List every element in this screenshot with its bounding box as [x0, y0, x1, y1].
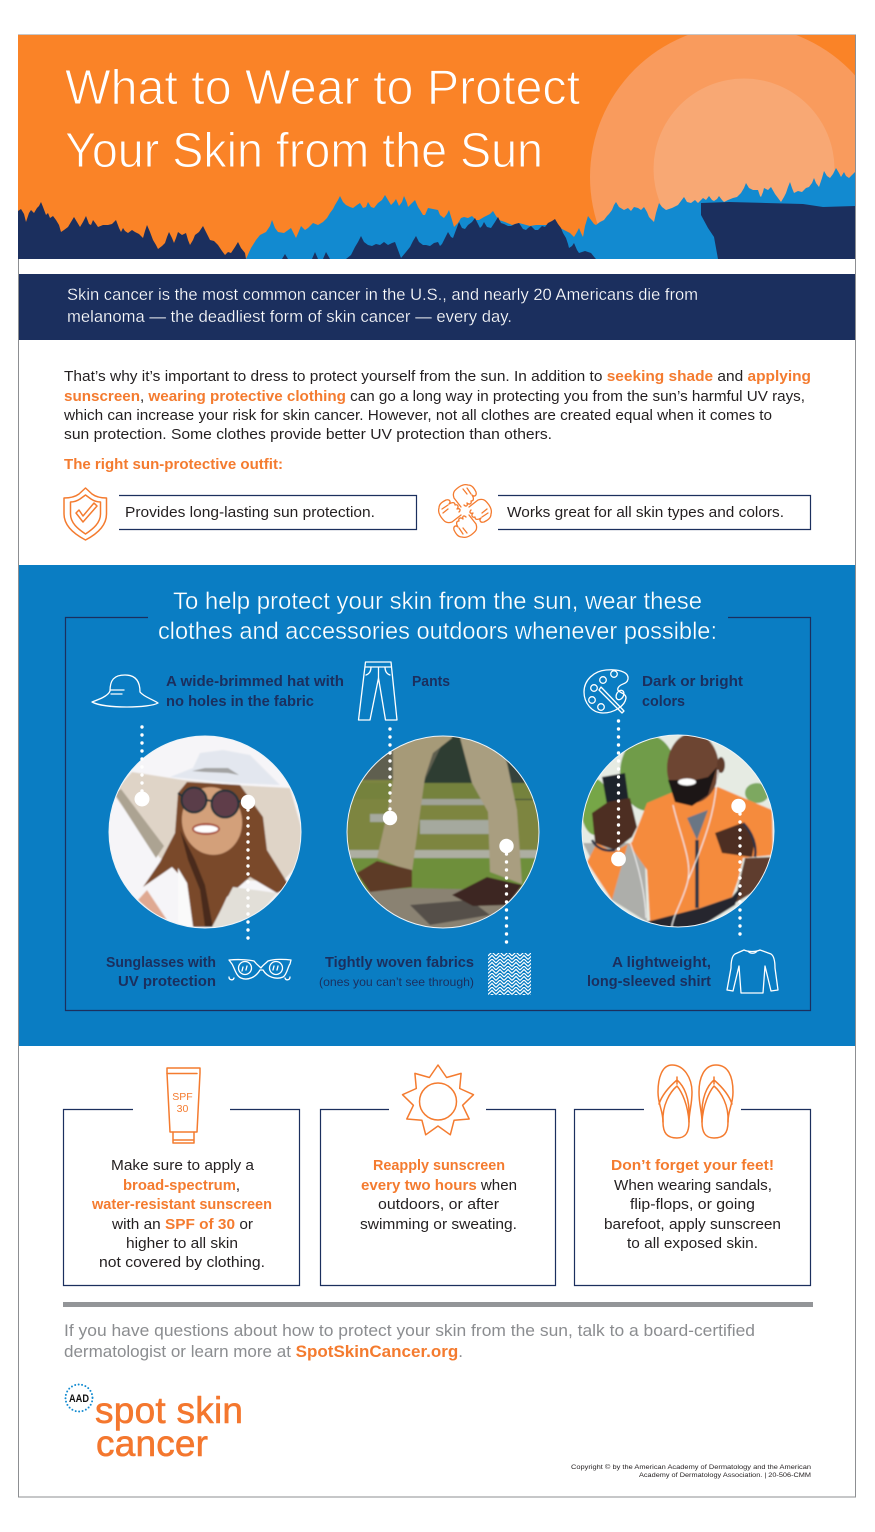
- tip frame: [320, 1110, 556, 1286]
- logo: spot skin cancer: [66, 1384, 243, 1464]
- tip text: Reapply sunscreen: [373, 1157, 505, 1174]
- hero banner: [18, 35, 855, 259]
- label: fabrics: [319, 954, 474, 989]
- tip text: Don’t forget your feet!: [611, 1157, 774, 1174]
- photo: woman in hat and sunglasses: [105, 732, 305, 932]
- icon: four joined hands: [439, 485, 491, 537]
- tip text: swimming or sweating.: [360, 1216, 517, 1233]
- intro paragraph: sun protection. Some clothes provide better UV protection than others.: [64, 426, 552, 443]
- tip text: flip-flops, or going: [630, 1196, 755, 1213]
- label: pants: Pants: [412, 673, 450, 690]
- copyright: Academy of Dermatology Association. | 20-506-CMM: [639, 1472, 811, 1479]
- label: colors: colors: [642, 693, 685, 710]
- intro paragraph: [63, 368, 811, 443]
- icon: woven fabric: [488, 953, 531, 995]
- icon: sunscreen tube: [167, 1068, 200, 1143]
- panel: feet tip: [574, 1065, 810, 1286]
- logo wordmark: [95, 1390, 243, 1464]
- dotted connector: sunglasses: [241, 795, 255, 944]
- tip text: [360, 1157, 517, 1233]
- gray divider bar: [63, 1302, 813, 1307]
- panel heading: To help protect your skin from the sun, wear these: [173, 588, 702, 615]
- callout: long-lasting protection: [119, 496, 416, 530]
- callout: long-lasting protection: Provides long-lasting sun protection.: [125, 504, 375, 521]
- label: sunglasses: UV protection: [118, 973, 216, 990]
- panel: blue clothing section: [19, 565, 855, 1046]
- panel background: [19, 565, 855, 1046]
- tip text: [91, 1157, 272, 1271]
- sun outer ring: [590, 35, 855, 224]
- label: fabrics: Tightly woven fabrics: [325, 954, 474, 971]
- hero title: What to Wear to Protect: [65, 61, 580, 115]
- panel heading: clothes and accessories outdoors whenever possible:: [158, 618, 717, 645]
- label: colors: Dark or bright: [642, 673, 743, 690]
- tip text: [604, 1157, 781, 1252]
- copyright: [571, 1463, 811, 1479]
- callout: all skin types: Works great for all skin types and colors.: [507, 504, 784, 521]
- label: hat: no holes in the fabric: [166, 693, 314, 710]
- tip frame: [574, 1110, 810, 1286]
- tip text: outdoors, or after: [378, 1196, 499, 1213]
- panel: sunscreen tip: [64, 1068, 300, 1286]
- panel heading: [158, 588, 717, 645]
- panel inner frame: [66, 618, 810, 1010]
- logo AAD seal: AAD: [69, 1393, 89, 1405]
- closing note: If you have questions about how to protect your skin from the sun, talk to a board-certified: [64, 1321, 755, 1340]
- tip text: not covered by clothing.: [99, 1254, 265, 1271]
- icon: long-sleeved shirt: [727, 950, 778, 993]
- tip text: higher to all skin: [126, 1235, 238, 1252]
- icon: palette: [584, 670, 628, 713]
- label: hat: A wide-brimmed hat with: [166, 673, 344, 690]
- tip frame: [64, 1110, 300, 1286]
- hero orange sky: [18, 35, 855, 259]
- callout: all skin types: [498, 496, 810, 530]
- photo: man in orange jacket: [580, 732, 780, 932]
- logo AAD seal: [66, 1384, 92, 1412]
- closing note: [64, 1321, 755, 1361]
- icon: hat: [92, 675, 158, 707]
- photo rims: [109, 735, 774, 928]
- label: fabrics: (ones you can’t see through): [319, 975, 474, 989]
- intro paragraph: sunscreen, wearing protective clothing can go a long way in protecting you from the sun’s harmful UV rays,: [64, 388, 805, 405]
- label: shirt: A lightweight,: [612, 954, 711, 971]
- closing note: dermatologist or learn more at SpotSkinCancer.org.: [64, 1342, 463, 1361]
- navy cliff: [701, 202, 855, 259]
- navy intro band: [19, 274, 855, 340]
- icon: sunscreen tube: 30: [177, 1103, 188, 1115]
- tip text: barefoot, apply sunscreen: [604, 1216, 781, 1233]
- logo wordmark: cancer: [96, 1423, 208, 1464]
- label: sunglasses: [106, 954, 216, 990]
- intro paragraph: That’s why it’s important to dress to protect yourself from the sun. In addition to seeking shade and applying: [64, 368, 811, 385]
- icon: pants: [358, 662, 397, 720]
- icon: sunglasses: [229, 959, 291, 980]
- tip text: every two hours when: [361, 1177, 517, 1194]
- hero title: Your Skin from the Sun: [65, 124, 543, 178]
- label: colors: [642, 673, 743, 710]
- dotted connector: fabric: [499, 839, 514, 944]
- dotted connector: colors: [611, 721, 626, 866]
- label: sunglasses: Sunglasses with: [106, 954, 216, 971]
- blue tree line: [246, 168, 855, 259]
- label: shirt: [587, 954, 711, 990]
- label: hat: [166, 673, 344, 710]
- intro paragraph: which can increase your risk for skin cancer. However, not all clothes are created equal when it comes to: [63, 407, 772, 424]
- tip text: When wearing sandals,: [614, 1177, 772, 1194]
- photo: hiker legs: [348, 736, 538, 928]
- navy intro band: Skin cancer is the most common cancer in the U.S., and nearly 20 Americans die from: [67, 286, 698, 304]
- label: shirt: long-sleeved shirt: [587, 973, 711, 990]
- navy tree line left: [18, 202, 246, 259]
- icon: shield with check: [64, 488, 106, 540]
- outfit subheading: The right sun-protective outfit:: [64, 457, 283, 473]
- tip text: Make sure to apply a: [111, 1157, 255, 1174]
- sun inner disc: [654, 78, 834, 210]
- dotted connector: shirt: [731, 799, 746, 938]
- tip text: to all exposed skin.: [627, 1235, 758, 1252]
- logo wordmark: spot skin: [95, 1390, 243, 1431]
- panel: reapply tip: [320, 1065, 556, 1286]
- dotted connector: pants: [383, 729, 397, 825]
- navy intro band: melanoma — the deadliest form of skin cancer — every day.: [67, 308, 512, 326]
- copyright: Copyright © by the American Academy of Dermatology and the American: [571, 1463, 811, 1471]
- navy tree line middle: [282, 217, 596, 259]
- tip text: with an SPF of 30 or: [111, 1216, 253, 1233]
- tip text: broad-spectrum,: [123, 1177, 240, 1194]
- tip text: water-resistant sunscreen: [91, 1196, 272, 1213]
- icon: sun: [402, 1065, 474, 1135]
- icon: sunscreen tube: SPF: [172, 1091, 193, 1103]
- dotted connector: hat: [134, 727, 150, 806]
- hero title: [65, 61, 580, 178]
- icon: flip-flops: [658, 1065, 733, 1138]
